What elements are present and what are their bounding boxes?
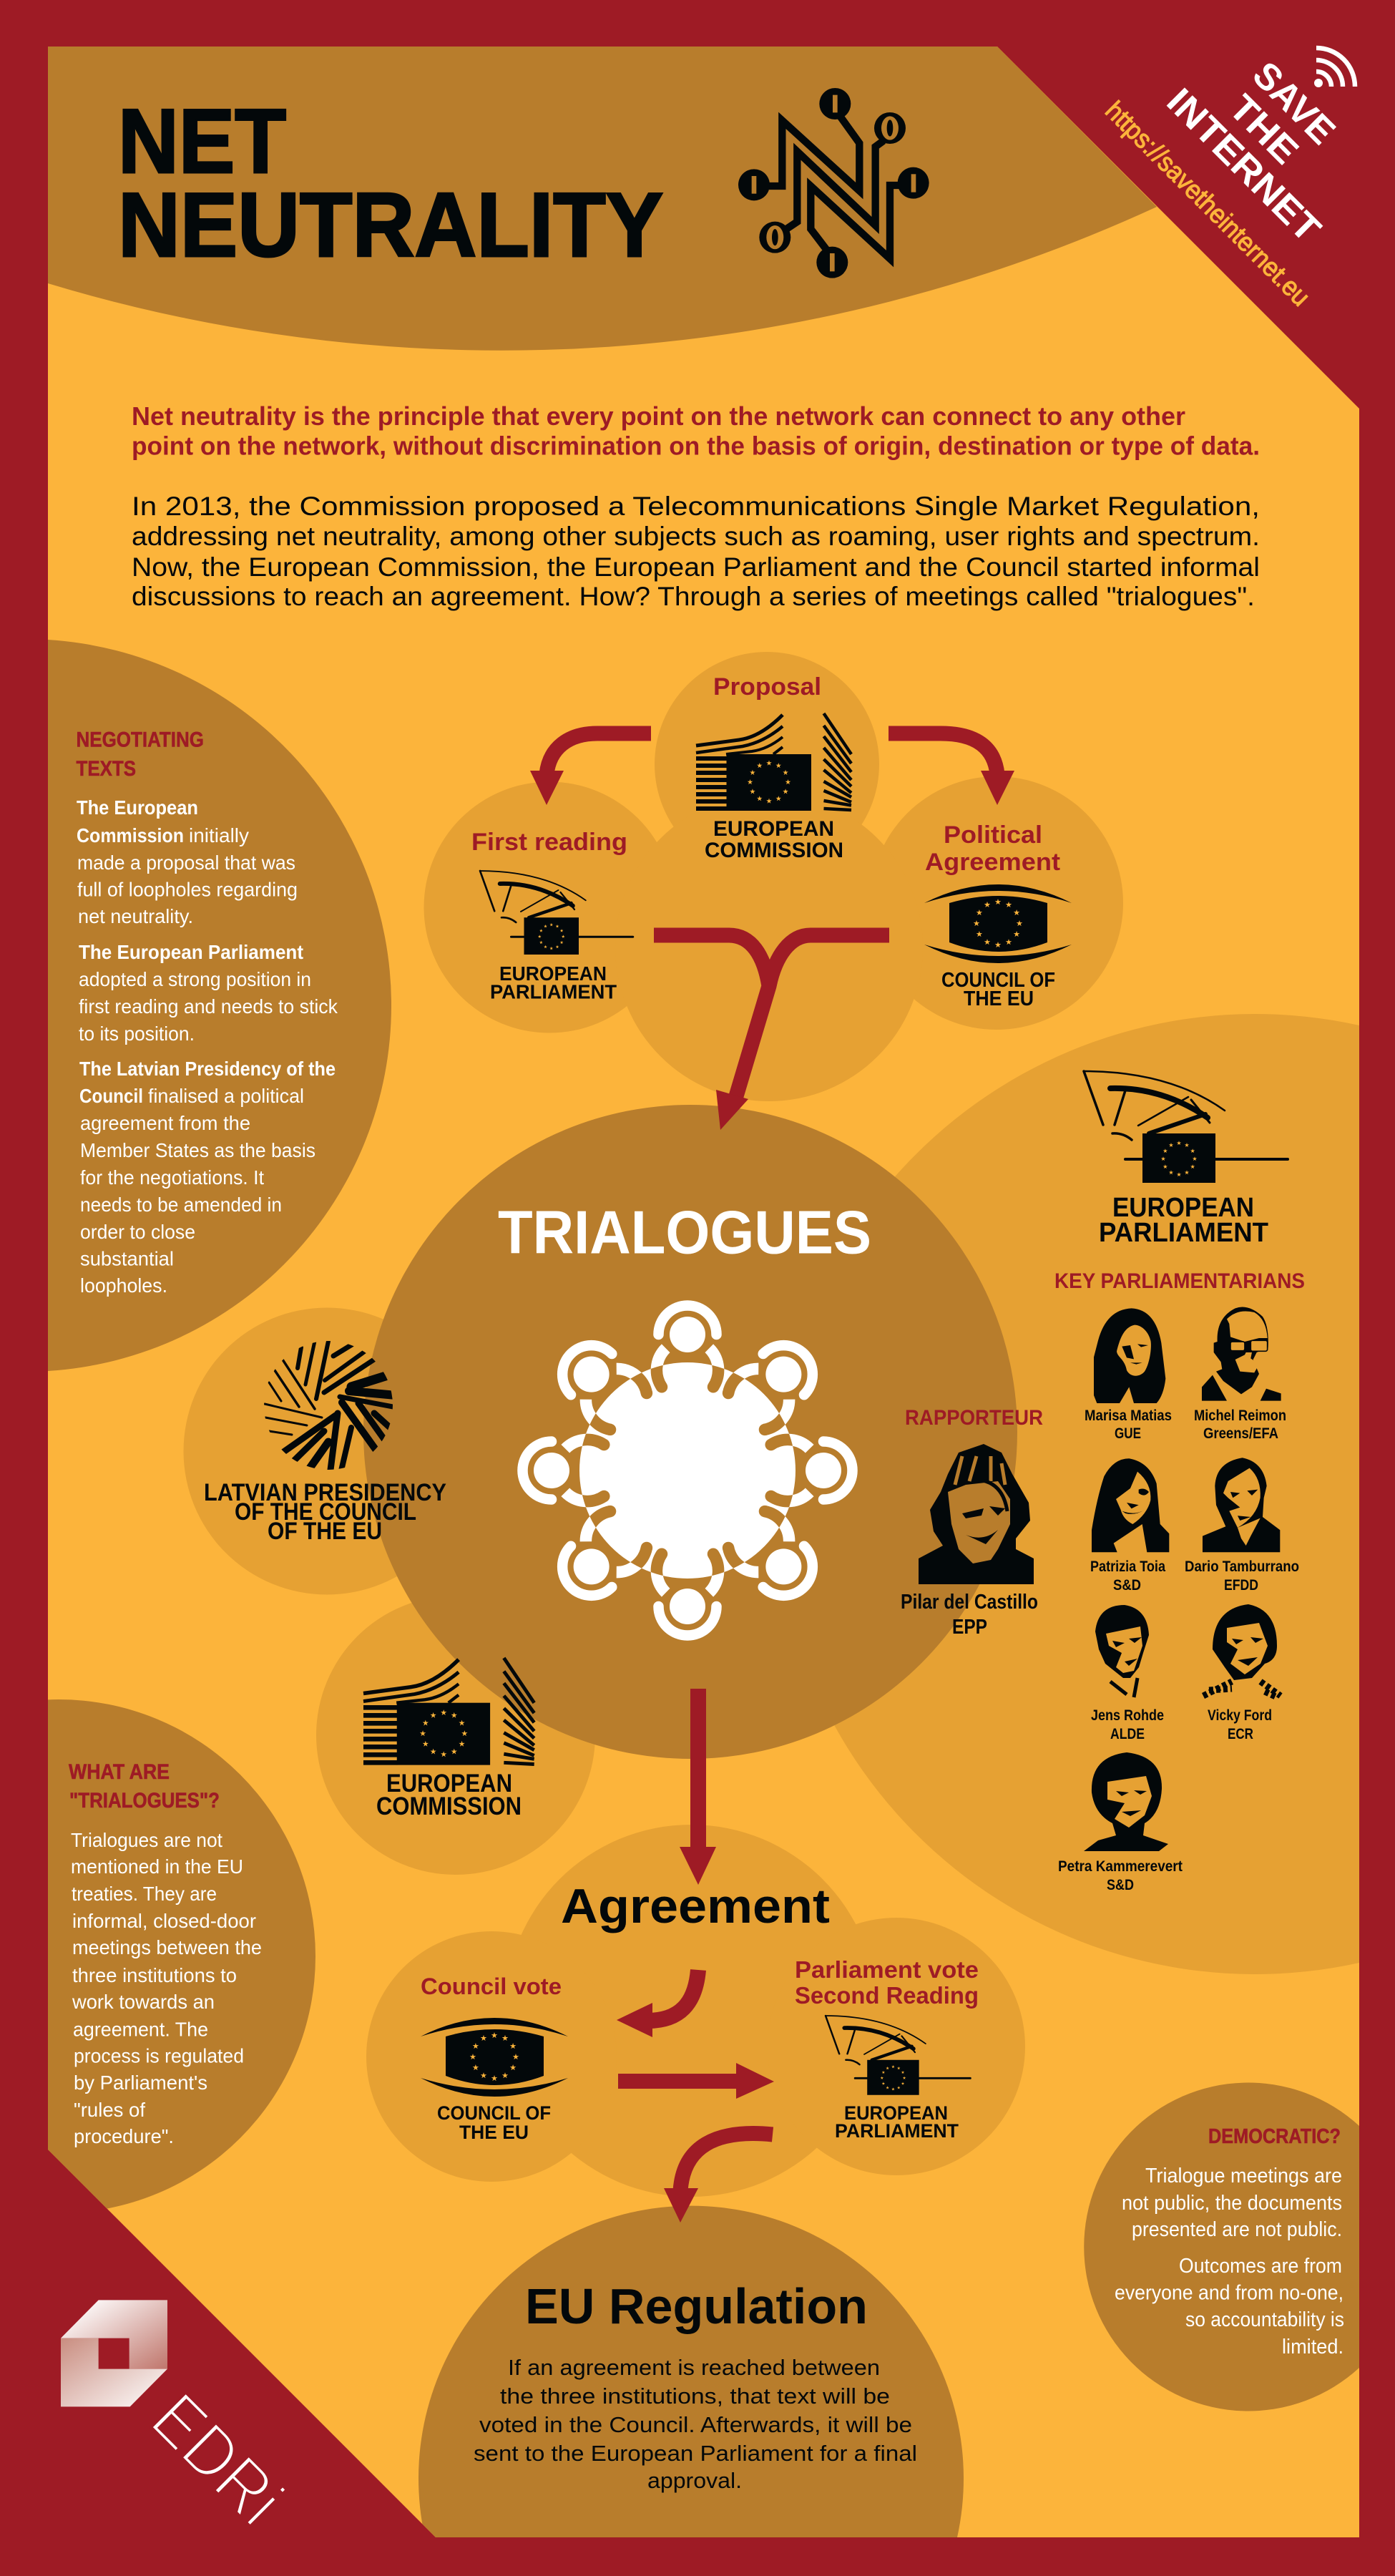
text: negotiating body: loopholes. — [80, 1274, 167, 1297]
badge: save the internet: https://savetheinternet.eu — [1100, 96, 1316, 312]
portrait: vicky ford — [1203, 1604, 1281, 1742]
text: negotiating body: The European — [77, 796, 198, 819]
panel: latvian presidency: LATVIAN PRESIDENCY — [204, 1479, 446, 1506]
circle: european commission — [316, 1596, 595, 1875]
text: negotiating body: Commission — [77, 824, 184, 847]
portrait: jens rohde: ALDE — [1110, 1726, 1145, 1742]
step: political agreement: Political — [944, 821, 1042, 849]
text: democratic body: everyone and from no-one, — [1115, 2281, 1343, 2304]
step: first reading — [471, 829, 633, 1003]
text: negotiating body: Council — [79, 1085, 143, 1107]
portrait: vicky ford: Vicky Ford — [1208, 1707, 1272, 1724]
text: trialogues body: "rules of — [74, 2099, 145, 2121]
panel: european commission: COMMISSION — [376, 1792, 522, 1820]
step: political agreement — [924, 821, 1072, 1010]
portrait: marisa matias: GUE — [1115, 1425, 1141, 1442]
text: negotiating body: for the negotiations. It — [80, 1166, 264, 1189]
portrait: michel reimon — [1194, 1307, 1286, 1442]
portrait: patrizia toia: S&D — [1113, 1577, 1141, 1594]
text: trialogues body: agreement. The — [73, 2018, 208, 2041]
arrow: agreement to council vote — [617, 1970, 698, 2037]
circle: negotiating texts — [48, 640, 391, 1371]
text: negotiating body: finalised a political — [148, 1085, 304, 1107]
process cluster circles top — [424, 652, 1123, 1101]
title: NET — [118, 90, 286, 192]
text: negotiating body: The European Parliament — [79, 941, 303, 963]
text: trialogues body: informal, closed-door — [72, 1910, 256, 1932]
arrow: proposal to first reading — [530, 733, 651, 805]
definition of net neutrality: Net neutrality is the principle that every point on the network can connect to any other — [132, 401, 1185, 431]
badge: save the internet: INTERNET — [1159, 80, 1328, 250]
header shape — [48, 47, 1157, 351]
definition of net neutrality — [132, 401, 1260, 461]
text: negotiating body: initially — [189, 824, 249, 847]
text: negotiating body: to its position. — [79, 1023, 195, 1045]
step: parliament vote: Parliament vote — [795, 1956, 979, 1983]
text: trialogues body — [71, 1829, 262, 2147]
text: trialogues body: three institutions to — [72, 1964, 237, 1986]
portrait: michel reimon: Greens/EFA — [1203, 1425, 1278, 1442]
icon: european commission — [696, 713, 851, 811]
title — [118, 90, 663, 275]
text: negotiating body — [77, 796, 338, 1297]
text: negotiating body: Member States as the basis — [80, 1139, 315, 1161]
text: democratic body: presented are not public. — [1132, 2218, 1342, 2241]
text: negotiating body: agreement from the — [80, 1112, 250, 1134]
step: parliament vote: PARLIAMENT — [835, 2120, 959, 2142]
text: trialogues body: by Parliament's — [74, 2072, 207, 2094]
rapporteur — [901, 1406, 1043, 1639]
step: political agreement: Agreement — [925, 849, 1060, 876]
icon: european parliament — [826, 2016, 970, 2095]
text: democratic body: Outcomes are from — [1179, 2255, 1342, 2278]
arrow: merge to trialogues — [654, 935, 889, 1130]
portrait: petra kammerevert — [1058, 1752, 1183, 1893]
text: trialogues body: process is regulated — [74, 2045, 244, 2067]
intro paragraph: Now, the European Commission, the European Parliament and the Council started informal — [132, 552, 1260, 582]
panel: parliament — [1054, 1071, 1305, 1293]
text: negotiating body: order to close — [80, 1221, 195, 1243]
step: first reading: EUROPEAN — [499, 962, 607, 985]
heading: what are trialogues: "TRIALOGUES"? — [69, 1789, 220, 1813]
intro paragraph: In 2013, the Commission proposed a Telecommunications Single Market Regulation, — [132, 492, 1260, 521]
heading: what are trialogues: WHAT ARE — [69, 1760, 170, 1784]
panel: european commission — [363, 1658, 534, 1820]
portrait: vicky ford: ECR — [1228, 1726, 1253, 1742]
rapporteur: RAPPORTEUR — [905, 1406, 1043, 1430]
portrait: patrizia toia: Patrizia Toia — [1090, 1558, 1165, 1575]
logo: edri — [61, 2300, 298, 2540]
arrow: council vote to parliament vote — [618, 2063, 774, 2099]
circle: european parliament — [834, 1014, 1359, 1974]
text: trialogues body: meetings between the — [72, 1936, 262, 1958]
definition of net neutrality: point on the network, without discrimination on the basis of origin, destination or type of data. — [132, 431, 1260, 461]
heading: negotiating texts — [76, 728, 204, 781]
text: eu regulation body: the three institutions, that text will be — [500, 2384, 890, 2409]
step: first reading: First reading — [471, 829, 627, 856]
panel: latvian presidency — [204, 1331, 446, 1545]
portrait: marisa matias: Marisa Matias — [1085, 1407, 1172, 1424]
intro paragraph — [132, 492, 1260, 611]
panel: european commission: EUROPEAN — [386, 1770, 512, 1797]
badge: save the internet: THE — [1221, 87, 1306, 172]
portrait: dario tamburrano — [1185, 1458, 1299, 1594]
portrait: jens rohde — [1091, 1605, 1164, 1742]
text: negotiating body: needs to be amended in — [80, 1194, 282, 1216]
circle: trialogues — [363, 1105, 1017, 1759]
step: first reading: PARLIAMENT — [490, 980, 617, 1003]
step: council vote: Council vote — [421, 1974, 562, 1999]
logo: edri: EDRi — [136, 2378, 298, 2540]
step: political agreement: THE EU — [964, 987, 1034, 1010]
step: proposal: COMMISSION — [705, 839, 843, 862]
text: democratic body: Trialogue meetings are — [1145, 2165, 1342, 2187]
portrait: patrizia toia — [1090, 1458, 1169, 1594]
step: parliament vote — [795, 1956, 979, 2142]
heading: negotiating texts: NEGOTIATING — [76, 728, 204, 751]
portrait: dario tamburrano: EFDD — [1224, 1577, 1258, 1594]
arrow: trialogues to agreement — [680, 1689, 716, 1885]
rapporteur: EPP — [952, 1616, 987, 1639]
portrait: michel reimon: Michel Reimon — [1194, 1407, 1286, 1424]
circle: latvian presidency — [183, 1308, 397, 1594]
step: political agreement: COUNCIL OF — [941, 969, 1055, 992]
text: trialogues body: mentioned in the EU — [71, 1855, 243, 1878]
text: negotiating body: made a proposal that was — [77, 852, 295, 874]
icon: council of the eu — [421, 2018, 568, 2097]
text: democratic body: limited. — [1282, 2336, 1343, 2358]
panel: negotiating texts — [76, 728, 338, 1297]
panel: latvian presidency: OF THE EU — [268, 1518, 382, 1545]
arrow: parliament vote to eu regulation — [664, 2134, 773, 2223]
step: proposal: EUROPEAN — [713, 817, 834, 841]
icon: edri cube — [61, 2300, 167, 2406]
text: eu regulation body: approval. — [647, 2468, 742, 2493]
title: NEUTRALITY — [118, 174, 663, 275]
portrait: petra kammerevert: Petra Kammerevert — [1058, 1858, 1183, 1875]
intro paragraph: addressing net neutrality, among other subjects such as roaming, user rights and spectrum. — [132, 522, 1260, 551]
circle: what are trialogues — [48, 1699, 315, 2208]
step: council vote: THE EU — [459, 2122, 529, 2143]
trialogues heading: TRIALOGUES — [498, 1199, 871, 1267]
rapporteur: Pilar del Castillo — [901, 1591, 1038, 1614]
text: negotiating body: substantial — [80, 1248, 174, 1269]
step: proposal — [696, 673, 851, 862]
panel: what are trialogues — [69, 1760, 262, 2147]
panel: eu regulation: EU Regulation — [525, 2278, 868, 2334]
circle: eu regulation — [418, 2206, 964, 2537]
agreement cluster circles — [366, 1825, 1025, 2197]
text: negotiating body: first reading and needs to stick — [79, 995, 338, 1018]
step: parliament vote: EUROPEAN — [844, 2102, 948, 2124]
icon: european commission — [363, 1658, 534, 1765]
icon: round table — [522, 1305, 853, 1636]
portrait: pilar del castillo — [919, 1444, 1034, 1584]
intro paragraph: discussions to reach an agreement. How? Through a series of meetings called "trialogues". — [132, 582, 1255, 611]
text: negotiating body: net neutrality. — [78, 905, 193, 927]
badge: save the internet: SAVE — [1245, 54, 1343, 152]
heading: key parliamentarians: KEY PARLIAMENTARIANS — [1054, 1269, 1305, 1293]
step: council vote: COUNCIL OF — [437, 2102, 551, 2124]
text: trialogues body: work towards an — [72, 1991, 215, 2013]
arrow: proposal to political agreement — [889, 733, 1014, 805]
icon: european parliament — [480, 871, 633, 955]
heading: what are trialogues — [69, 1760, 220, 1813]
text: negotiating body: adopted a strong position in — [79, 968, 311, 990]
text: eu regulation body: If an agreement is reached between — [508, 2355, 880, 2380]
text: negotiating body: The Latvian Presidency of the — [79, 1058, 336, 1080]
agreement heading: Agreement — [561, 1879, 830, 1933]
heading: democratic: DEMOCRATIC? — [1208, 2125, 1341, 2148]
text: democratic body — [1115, 2165, 1344, 2358]
panel: parliament: EUROPEAN — [1112, 1193, 1254, 1223]
heading: negotiating texts: TEXTS — [76, 757, 136, 781]
icon: latvian pinwheel — [264, 1341, 393, 1470]
portrait: marisa matias — [1085, 1308, 1172, 1442]
text: eu regulation body — [474, 2355, 917, 2493]
step: council vote — [421, 1974, 568, 2143]
portrait: dario tamburrano: Dario Tamburrano — [1185, 1558, 1299, 1575]
text: negotiating body: full of loopholes regarding — [77, 879, 298, 900]
portrait: jens rohde: Jens Rohde — [1091, 1707, 1164, 1724]
icon: circuit letter N — [738, 88, 929, 278]
panel: democratic — [1115, 2125, 1344, 2358]
text: democratic body: not public, the documents — [1122, 2192, 1342, 2215]
text: eu regulation body: sent to the European Parliament for a final — [474, 2441, 917, 2466]
text: trialogues body: Trialogues are not — [71, 1829, 222, 1851]
icon: european parliament — [1084, 1071, 1288, 1183]
text: trialogues body: treaties. They are — [72, 1883, 217, 1905]
portrait: petra kammerevert: S&D — [1107, 1877, 1134, 1893]
panel: eu regulation — [474, 2278, 917, 2493]
panel: latvian presidency: OF THE COUNCIL — [235, 1498, 416, 1526]
icon: wifi — [1316, 48, 1355, 87]
step: proposal: Proposal — [713, 673, 821, 701]
icon: council of the eu — [924, 884, 1072, 963]
step: parliament vote: Second Reading — [795, 1982, 979, 2009]
text: eu regulation body: voted in the Council. Afterwards, it will be — [479, 2412, 912, 2437]
text: democratic body: so accountability is — [1185, 2308, 1344, 2331]
circle: democratic — [1084, 2082, 1359, 2411]
panel: parliament: PARLIAMENT — [1099, 1218, 1268, 1248]
text: trialogues body: procedure". — [74, 2125, 174, 2147]
